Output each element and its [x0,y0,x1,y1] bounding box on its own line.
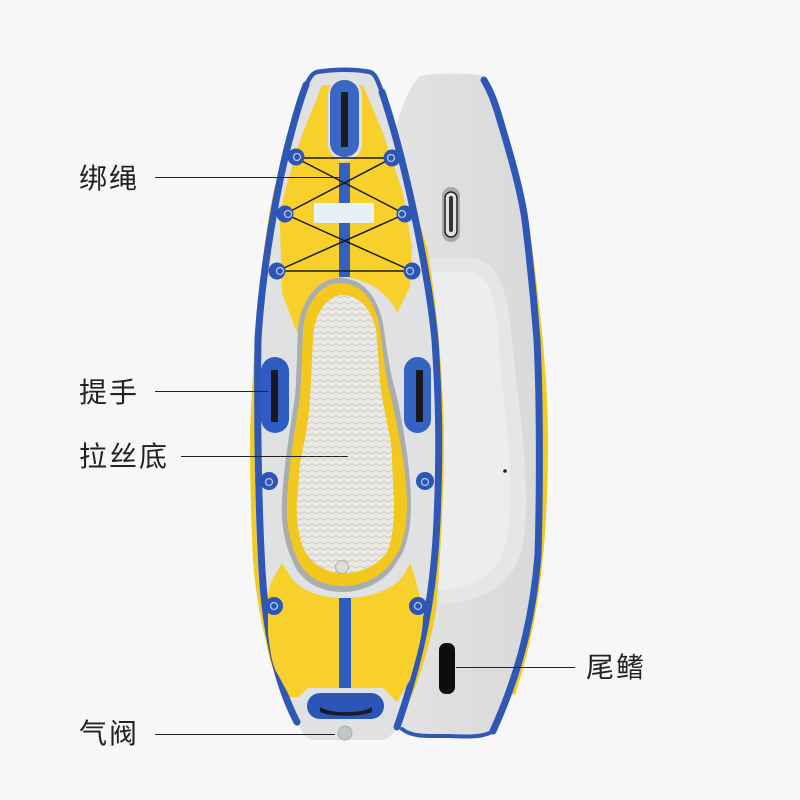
board: front view [250,69,444,740]
stern handle [307,693,384,719]
back yellow edge [500,225,548,695]
bungee cord [277,158,412,271]
air valve [338,726,352,740]
callout: 气阀: 气阀 [79,718,139,749]
stern blue centre strip [339,598,351,688]
floor valve [336,560,348,574]
hull dot [503,469,507,473]
D-rings [260,148,434,615]
back blue edge [484,80,539,731]
left carry handle [261,357,289,433]
back hull [390,74,539,738]
cockpit yellow ring [287,283,407,586]
front blue top edge [306,70,382,92]
D-ring centres [266,154,428,610]
callout: 提手: 提手 [79,377,139,408]
front blue right edge [382,92,439,727]
front yellow edge [250,185,444,727]
back inner light panel [432,272,510,590]
bow blue centre strip [339,163,350,277]
bow yellow panel [280,85,412,333]
callout: 拉丝底: 拉丝底 [79,441,169,472]
cockpit mesh floor [297,295,394,573]
back blue bottom edge [402,729,493,736]
board: back view [390,74,548,738]
callout: 尾鳍: 尾鳍 [586,652,646,683]
rear fin [439,643,455,694]
front hull [255,69,439,740]
front blue left edge [258,85,306,722]
callout: 绑绳: 绑绳 [79,163,139,194]
top fin slot [442,187,460,242]
right carry handle [404,357,431,433]
cockpit gray rim [282,278,411,592]
bow handle patch [328,78,362,161]
white label patch [314,203,374,223]
back recessed hull panel [430,258,526,603]
stern yellow panel [268,563,423,702]
